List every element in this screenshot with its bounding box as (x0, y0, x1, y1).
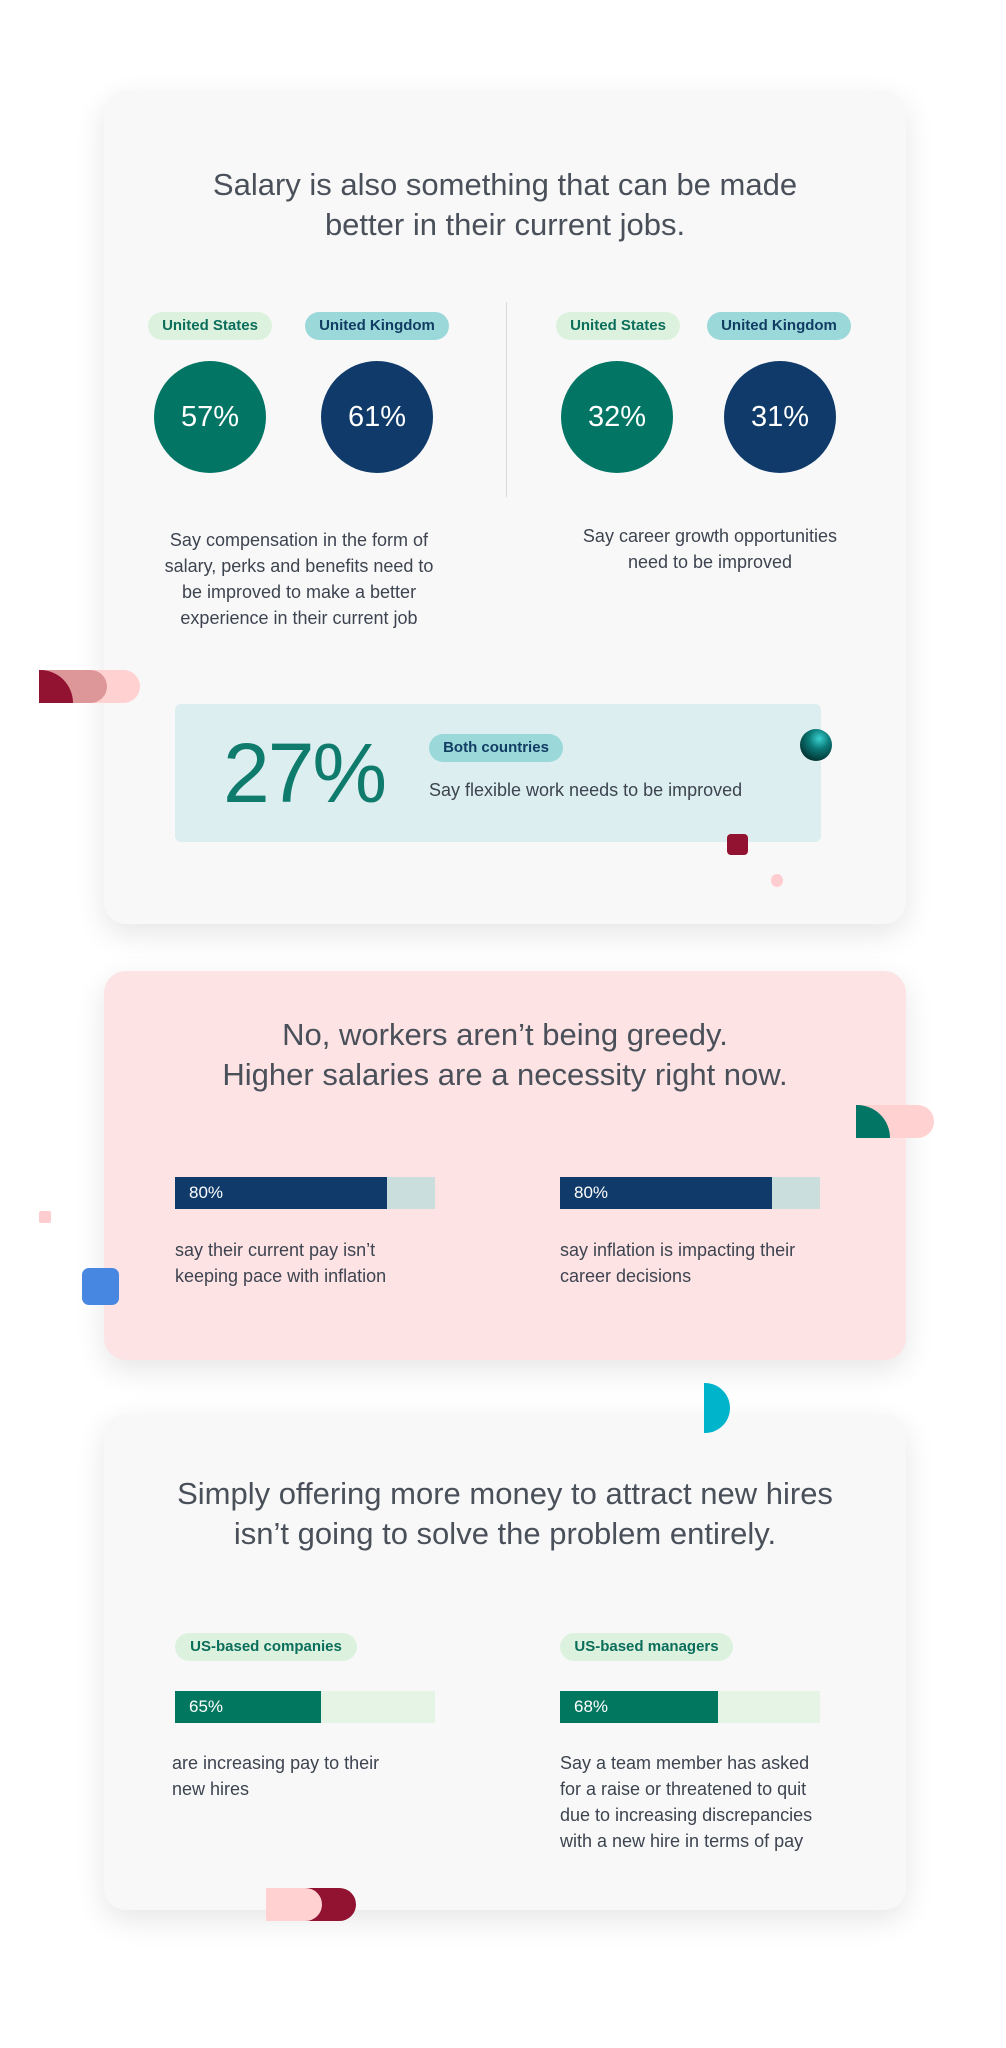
pill: US-based managers: US-based managers (574, 1638, 719, 1655)
bar: 68%: 68% (574, 1697, 608, 1716)
big number 27%: 27% (223, 726, 385, 820)
heading: new hires: Simply offering more money to attract new hires (177, 1476, 833, 1511)
pill: Both countries (429, 734, 563, 762)
decoration: green/pink pill (856, 1105, 934, 1138)
text: pay: say their current pay isn’t (175, 1240, 375, 1260)
text: pay: keeping pace with inflation (175, 1266, 386, 1286)
circle: 31%: 31% (751, 401, 809, 433)
circle: 61% (321, 361, 433, 473)
callout: 27% flexible work (175, 704, 821, 842)
pill: United States left (148, 312, 272, 340)
circle: 32% (561, 361, 673, 473)
pill: US-based companies (175, 1633, 357, 1661)
heading: new hires: isn’t going to solve the problem entirely. (234, 1516, 776, 1551)
pill: United Kingdom left (305, 312, 449, 340)
bar: 65%: 65% (189, 1697, 223, 1716)
text: inflation (560, 1240, 795, 1286)
pill: United States right: United States (570, 317, 666, 334)
bar: 80% inflation (560, 1177, 820, 1209)
text: career growth: need to be improved (628, 552, 792, 572)
bar: 65% (175, 1691, 435, 1723)
panel: salary (104, 91, 906, 924)
text: compensation: Say compensation in the form of salary, perks and benefits need to be improved to make a better experience in their current job (165, 530, 433, 628)
text: inflation: say inflation is impacting their (560, 1240, 795, 1260)
text: companies: new hires (172, 1779, 249, 1799)
pill: United Kingdom right (707, 312, 851, 340)
pill: US-based companies: US-based companies (190, 1638, 342, 1655)
circle: 57%: 57% (181, 401, 239, 433)
decoration: sphere (800, 729, 832, 761)
circle: 57% (154, 361, 266, 473)
decoration: teal half circle (704, 1383, 730, 1433)
text: career growth: Say career growth opportunities (583, 526, 837, 546)
bar: 68% (560, 1691, 820, 1723)
decoration: blue square (82, 1268, 119, 1305)
text: companies: are increasing pay to their (172, 1753, 379, 1773)
circle: 32%: 32% (588, 401, 646, 433)
heading: inflation: No, workers aren’t being greedy. (282, 1017, 728, 1052)
bar: 80% inflation: 80% (574, 1183, 608, 1202)
text: flexible: Say flexible work needs to be improved (429, 780, 742, 800)
decoration: left pink pill (39, 670, 140, 703)
text: career growth (583, 526, 837, 572)
panel: new hires (104, 1414, 906, 1910)
heading: new hires (177, 1476, 833, 1551)
pill: United Kingdom left: United Kingdom (319, 317, 435, 334)
pill: United Kingdom right: United Kingdom (721, 317, 837, 334)
circle: 61%: 61% (348, 401, 406, 433)
bar: 80% pay (175, 1177, 435, 1209)
heading: inflation: Higher salaries are a necessity right now. (222, 1057, 788, 1092)
decoration: maroon square (727, 834, 748, 855)
decoration: pink dot (771, 874, 783, 887)
circle: 31% (724, 361, 836, 473)
decoration: bottom pink/maroon pill (266, 1888, 356, 1921)
pill: Both countries: Both countries (443, 739, 549, 756)
heading: salary (213, 167, 797, 242)
heading: salary: better in their current jobs. (325, 207, 685, 242)
panel: inflation (104, 971, 906, 1360)
heading: salary: Salary is also something that can be made (213, 167, 797, 202)
text: inflation: career decisions (560, 1266, 691, 1286)
text: pay (175, 1240, 386, 1286)
pill: United States right (556, 312, 680, 340)
heading: inflation (222, 1017, 788, 1092)
pill: US-based managers (560, 1633, 733, 1661)
pill: United States left: United States (162, 317, 258, 334)
text: managers: Say a team member has asked for a raise or threatened to quit due to increasing discrepancies with a new hire in terms of pay (560, 1753, 812, 1851)
decoration: small pink square (39, 1211, 51, 1223)
text: companies (172, 1753, 379, 1799)
bar: 80% pay: 80% (189, 1183, 223, 1202)
